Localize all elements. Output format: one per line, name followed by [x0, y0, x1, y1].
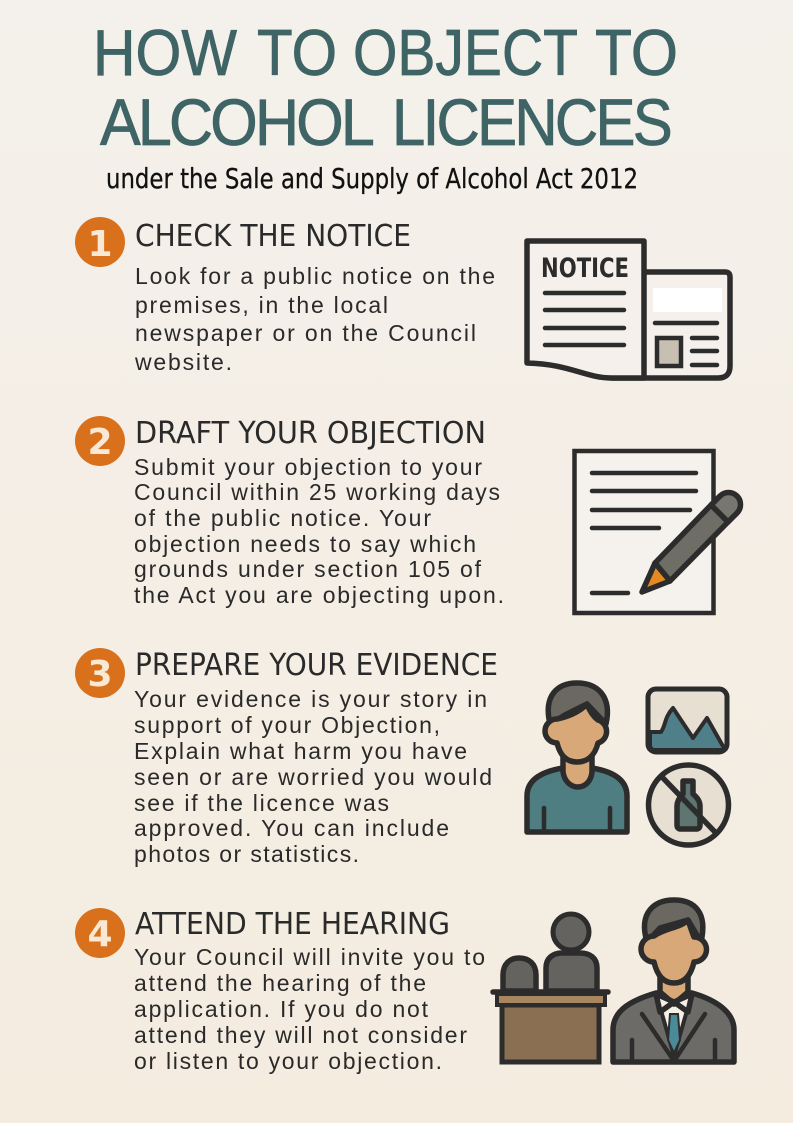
step 2: draft your objection	[75, 416, 741, 613]
step 2 text: grounds under section 105 of	[134, 556, 482, 582]
title: ALCOHOL	[100, 85, 373, 159]
icon: person	[527, 683, 627, 832]
step 1: check the notice	[75, 217, 730, 378]
step 1 text: premises, in the local	[135, 292, 388, 318]
step 3 text	[134, 686, 492, 867]
step 4 heading: ATTEND THE HEARING	[135, 907, 450, 942]
step 3 heading: PREPARE YOUR EVIDENCE	[135, 648, 498, 683]
step 1 heading: CHECK THE NOTICE	[135, 219, 411, 254]
step 3 text: approved. You can include	[134, 815, 449, 841]
step 4 text	[134, 944, 485, 1074]
step 2 number badge	[75, 416, 125, 466]
step 3 number badge: 3	[87, 654, 113, 695]
icon: no alcohol sign	[648, 765, 728, 845]
step 4 text: attend they will not consider	[134, 1022, 467, 1048]
step 1 text	[134, 263, 495, 375]
icon: notice and newspaper: NOTICE	[541, 253, 629, 284]
step 1 number badge	[75, 217, 125, 267]
step 2 text: the Act you are objecting upon.	[134, 582, 504, 608]
step 1 number badge: 1	[87, 224, 113, 265]
step 2 text: objection needs to say which	[134, 531, 476, 557]
title: LICENCES	[392, 85, 670, 159]
step 2 text: Council within 25 working days	[134, 479, 500, 505]
step 3 text: see if the licence was	[134, 790, 389, 816]
step 3 text: Your evidence is your story in	[134, 686, 487, 712]
step 3 number badge	[75, 648, 125, 698]
step 4 number badge	[75, 908, 125, 958]
step 4 text: application. If you do not	[134, 996, 429, 1022]
step 1 text: Look for a public notice on the	[135, 263, 495, 289]
icon: photo	[648, 689, 727, 752]
step 4: attend the hearing	[75, 900, 734, 1074]
icon: notice and newspaper	[527, 241, 730, 378]
step 3 text: Explain what harm you have	[134, 738, 467, 764]
step 2 heading: DRAFT YOUR OBJECTION	[135, 416, 486, 451]
step 2 text: of the public notice. Your	[134, 505, 431, 531]
step 4 number badge: 4	[87, 914, 113, 955]
title	[93, 16, 678, 159]
icon: document and pencil	[574, 451, 741, 613]
title: OBJECT	[353, 16, 578, 89]
step 2 text: Submit your objection to your	[134, 454, 482, 480]
step 1 text: newspaper or on the Council	[135, 320, 476, 346]
title: TO	[257, 16, 337, 89]
icon: hearing bench	[493, 914, 608, 1062]
title: TO	[595, 16, 678, 89]
step 3: prepare your evidence	[75, 648, 728, 867]
step 1 text: website.	[134, 349, 232, 375]
step 2 text	[134, 454, 504, 608]
step 3 text: seen or are worried you would	[134, 764, 492, 790]
step 4 text: or listen to your objection.	[134, 1048, 442, 1074]
step 4 text: attend the hearing of the	[134, 970, 426, 996]
step 3 text: support of your Objection,	[134, 712, 440, 738]
title: HOW	[93, 16, 238, 89]
step 3 text: photos or statistics.	[134, 841, 359, 867]
step 4 text: Your Council will invite you to	[134, 944, 485, 970]
subtitle: under the Sale and Supply of Alcohol Act 2012	[106, 162, 638, 195]
step 2 number badge: 2	[87, 422, 113, 463]
icon: man in suit	[613, 900, 734, 1062]
